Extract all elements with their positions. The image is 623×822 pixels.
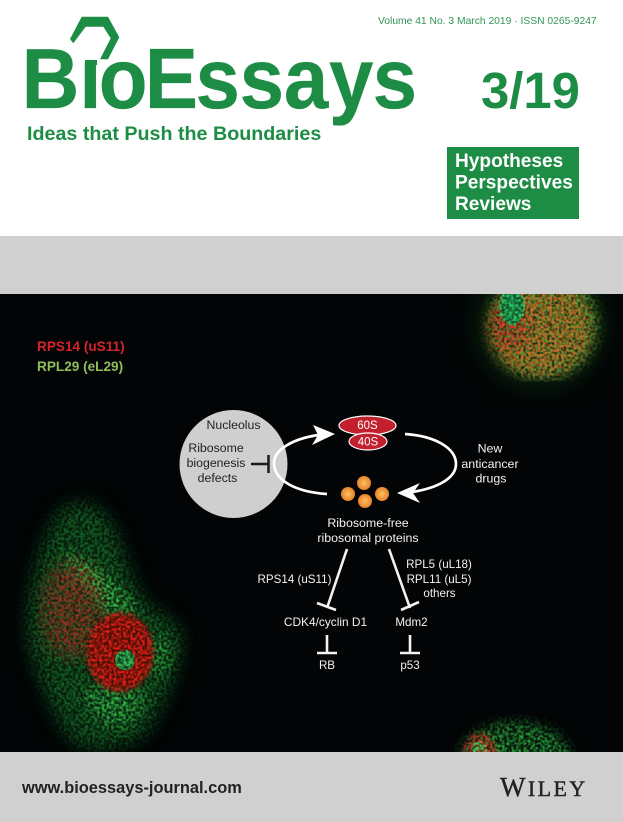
RPL labels: RPL5 (uL18)	[406, 558, 472, 571]
RPS14 label: RPS14 (uS11)	[258, 573, 332, 586]
tagline: Ideas that Push the Boundaries	[27, 123, 321, 145]
ribosome: 60S	[357, 420, 378, 432]
legend: RPS14 (uS11)	[37, 339, 125, 354]
green box: article types: Hypotheses	[455, 151, 563, 172]
issue line: Volume 41 No. 3 March 2019 · ISSN 0265-9247	[378, 16, 597, 27]
ribosome-free label: Ribosome-free	[327, 516, 409, 530]
nucleolus labels: biogenesis	[187, 456, 245, 470]
green box: article types	[447, 147, 579, 219]
RPL labels: RPL11 (uL5)	[407, 573, 472, 586]
ribosome-free label	[317, 516, 419, 545]
nucleolus labels: Ribosome	[188, 441, 244, 455]
legend	[37, 339, 125, 374]
ribosome-free label: ribosomal proteins	[317, 531, 419, 545]
cell: top right	[471, 294, 609, 394]
RPL labels: others	[423, 587, 456, 600]
footer band	[0, 752, 623, 822]
pathway diagram	[180, 410, 519, 672]
issue number: 3/19	[481, 62, 580, 119]
right pathway inhibition	[389, 549, 419, 610]
p53 label: p53	[400, 659, 420, 672]
nucleolus labels: defects	[198, 471, 237, 485]
cycle arrow: upper left	[274, 425, 335, 494]
CDK4 to RB inhibition	[317, 635, 337, 653]
free ribosomal protein beads	[341, 476, 389, 508]
Mdm2 to p53 inhibition	[400, 635, 420, 653]
ribosome: 40S	[358, 436, 379, 448]
new anticancer drugs label: New	[478, 442, 502, 456]
microscopy panel	[0, 294, 623, 752]
grey band	[0, 236, 623, 294]
website: www.bioessays-journal.com	[21, 779, 242, 797]
cycle arrow: right	[397, 434, 456, 503]
Mdm2 label: Mdm2	[395, 616, 428, 629]
nucleolus labels: Nucleolus	[206, 418, 260, 432]
new anticancer drugs label: anticancer	[461, 457, 519, 471]
nucleolus labels	[187, 418, 260, 485]
cell: lower left	[28, 503, 182, 749]
ribosome	[339, 416, 396, 450]
cell: bottom right	[454, 714, 576, 752]
legend: RPL29 (eL29)	[37, 359, 123, 374]
inhibition bar	[251, 455, 268, 473]
nucleolus	[180, 410, 288, 518]
publisher: Wiley: WILEY	[500, 772, 588, 802]
green box: article types: Perspectives	[455, 172, 573, 194]
green box: article types: Reviews	[455, 194, 531, 215]
new anticancer drugs label: drugs	[476, 472, 506, 486]
new anticancer drugs label	[461, 442, 519, 486]
RPL labels	[406, 558, 472, 600]
header background	[0, 0, 623, 236]
CDK4 label: CDK4/cyclin D1	[284, 615, 368, 629]
logo: BioEssays: BioEssays	[22, 32, 417, 127]
left pathway inhibition	[317, 549, 347, 610]
RB label: RB	[319, 659, 335, 672]
